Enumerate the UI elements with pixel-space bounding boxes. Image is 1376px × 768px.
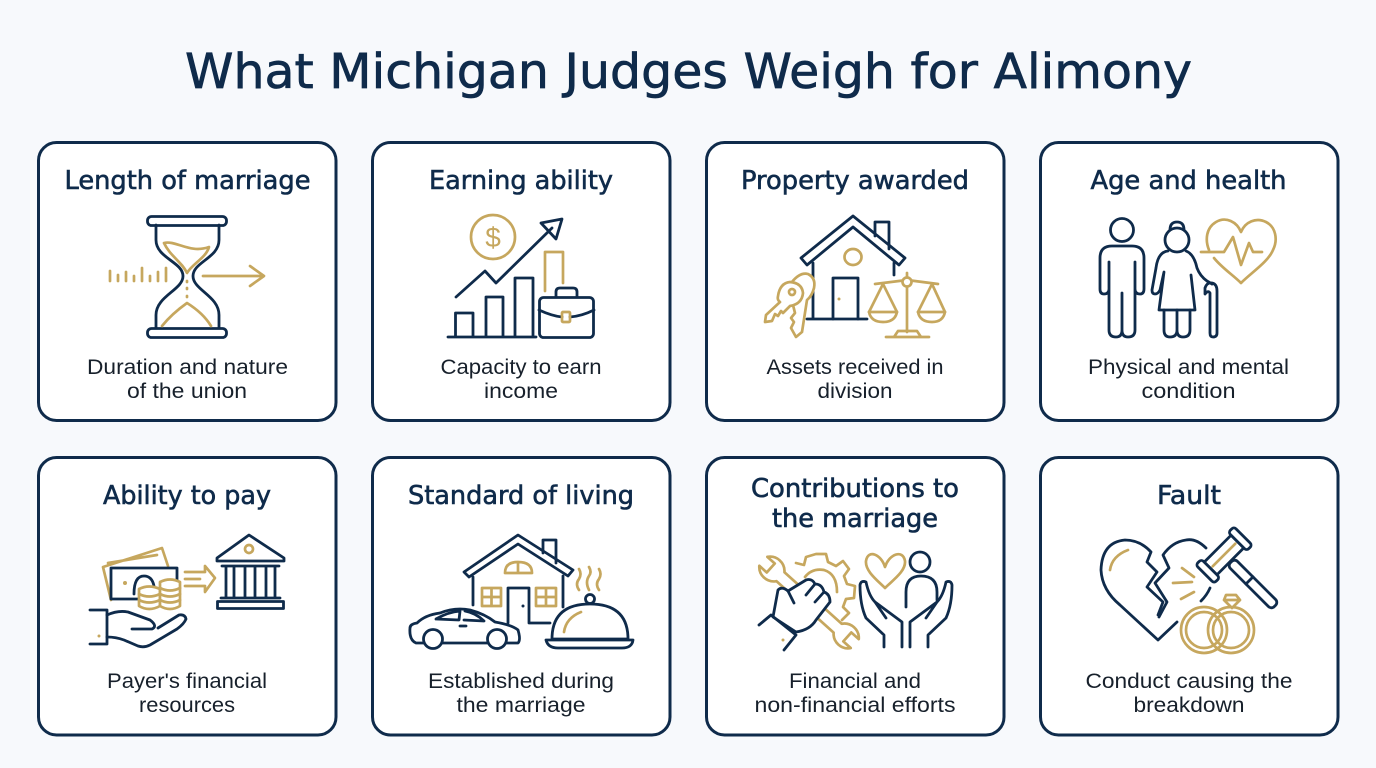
panel: contributions to the marriage: [706, 458, 1004, 735]
panel: length of marriage: [38, 142, 336, 420]
description: property awarded: Assets received in: [766, 356, 944, 379]
description: ability to pay: Payer's financial: [107, 670, 267, 693]
heading: ability to pay: Ability to pay: [103, 481, 271, 511]
description line 2: income: [484, 380, 558, 403]
icon: house, car and cloche: [410, 535, 633, 648]
description line 2: resources: [139, 694, 235, 717]
icon: money, hand and bank: [90, 535, 284, 647]
icon: broken heart, gavel and rings: [1101, 527, 1294, 653]
description line 2: of the union: [127, 380, 247, 403]
panel: standard of living: [372, 458, 670, 735]
panel: age and health: [1040, 142, 1338, 420]
panel: earning ability: [372, 142, 670, 420]
heading: property awarded: Property awarded: [741, 166, 969, 196]
description line 2: breakdown: [1134, 694, 1244, 717]
description: contributions: Financial and: [789, 670, 921, 693]
icon: two figures and heartbeat: [1100, 218, 1276, 337]
heading: contributions line 2: the marriage: [772, 504, 938, 534]
panel: fault: [1040, 458, 1338, 735]
icon: hourglass with timeline arrow: [110, 216, 264, 338]
icon: wrench, gear, fist, heart and caring hands: [756, 552, 952, 652]
heading: age and health: Age and health: [1090, 166, 1286, 196]
title: What Michigan Judges Weigh for Alimony: [185, 44, 1192, 100]
heading: contributions line 1: Contributions to: [751, 474, 959, 504]
description line 2: division: [818, 380, 892, 403]
heading: earning ability: Earning ability: [429, 166, 613, 196]
description line 2: condition: [1142, 380, 1236, 403]
description: fault: Conduct causing the: [1086, 670, 1292, 693]
heading: standard of living: Standard of living: [408, 481, 634, 511]
description: standard of living: Established during: [428, 670, 614, 693]
description: earning ability: Capacity to earn: [440, 356, 602, 379]
icon: growth chart, coin and briefcase: [448, 215, 594, 338]
heading: fault: Fault: [1157, 481, 1221, 511]
description line 2: non-financial efforts: [754, 694, 956, 717]
description: age and health: Physical and mental: [1088, 356, 1289, 379]
panel: property awarded: [706, 142, 1004, 420]
icon: house, keys and scales: [765, 216, 945, 337]
description: length of marriage: Duration and nature: [87, 356, 288, 379]
icon: growth chart, coin and briefcase: $: [485, 222, 501, 253]
description line 2: the marriage: [456, 694, 586, 717]
heading: length of marriage: Length of marriage: [64, 166, 310, 196]
panel: ability to pay: [38, 458, 336, 735]
